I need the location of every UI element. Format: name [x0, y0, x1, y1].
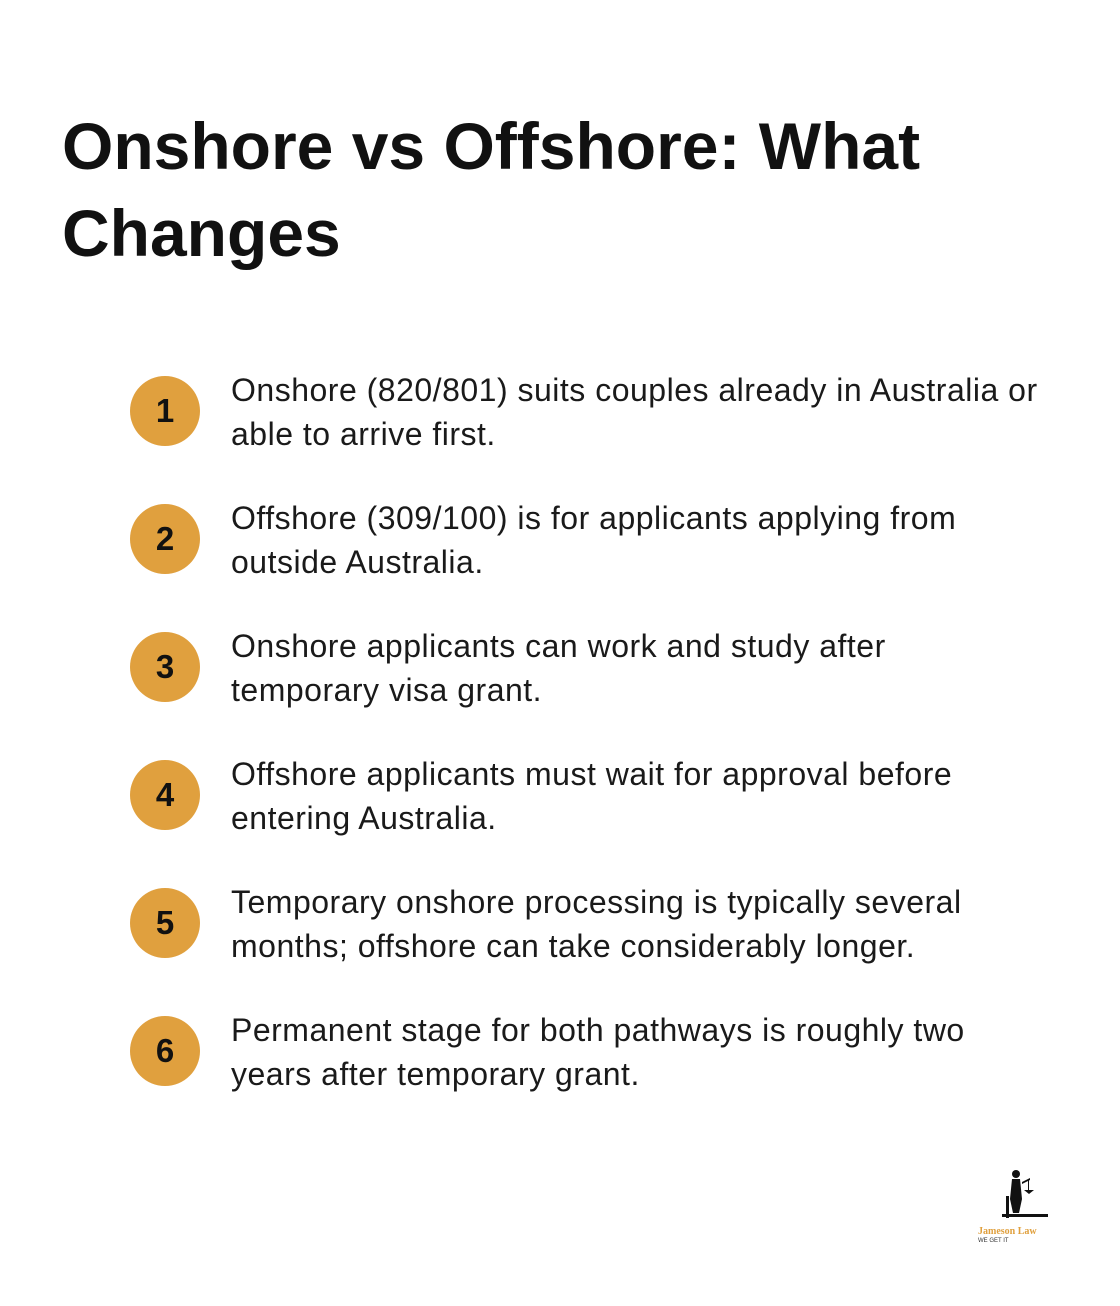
item 1: able to arrive first. — [231, 416, 496, 452]
item 4: Offshore applicants must wait for approval before — [231, 756, 952, 792]
item 1: 1 — [156, 392, 174, 429]
item 2: Offshore (309/100) is for applicants applying from — [231, 500, 956, 536]
item 1 — [130, 372, 1038, 452]
item 5: 5 — [156, 904, 174, 941]
logo — [978, 1170, 1048, 1244]
item 3 — [130, 628, 886, 708]
item 6 — [130, 1012, 965, 1092]
item 2 — [130, 500, 956, 580]
item 2: 2 — [156, 520, 174, 557]
item 5: Temporary onshore processing is typically several — [231, 884, 962, 920]
item 4 — [130, 756, 952, 836]
item 4: entering Australia. — [231, 800, 497, 836]
logo: WE GET IT — [978, 1238, 1009, 1244]
item 3: Onshore applicants can work and study after — [231, 628, 886, 664]
item 5 — [130, 884, 962, 964]
item 6: years after temporary grant. — [231, 1056, 640, 1092]
item 3: temporary visa grant. — [231, 672, 542, 708]
item 6: Permanent stage for both pathways is roughly two — [231, 1012, 965, 1048]
title: Onshore vs Offshore: What Changes — [62, 109, 920, 270]
item 6: 6 — [156, 1032, 174, 1069]
item 3: 3 — [156, 648, 174, 685]
item 2: outside Australia. — [231, 544, 484, 580]
item 5: months; offshore can take considerably longer. — [231, 928, 915, 964]
logo: Jameson Law — [978, 1226, 1037, 1237]
item 4: 4 — [156, 776, 174, 813]
item 1: Onshore (820/801) suits couples already in Australia or — [231, 372, 1038, 408]
